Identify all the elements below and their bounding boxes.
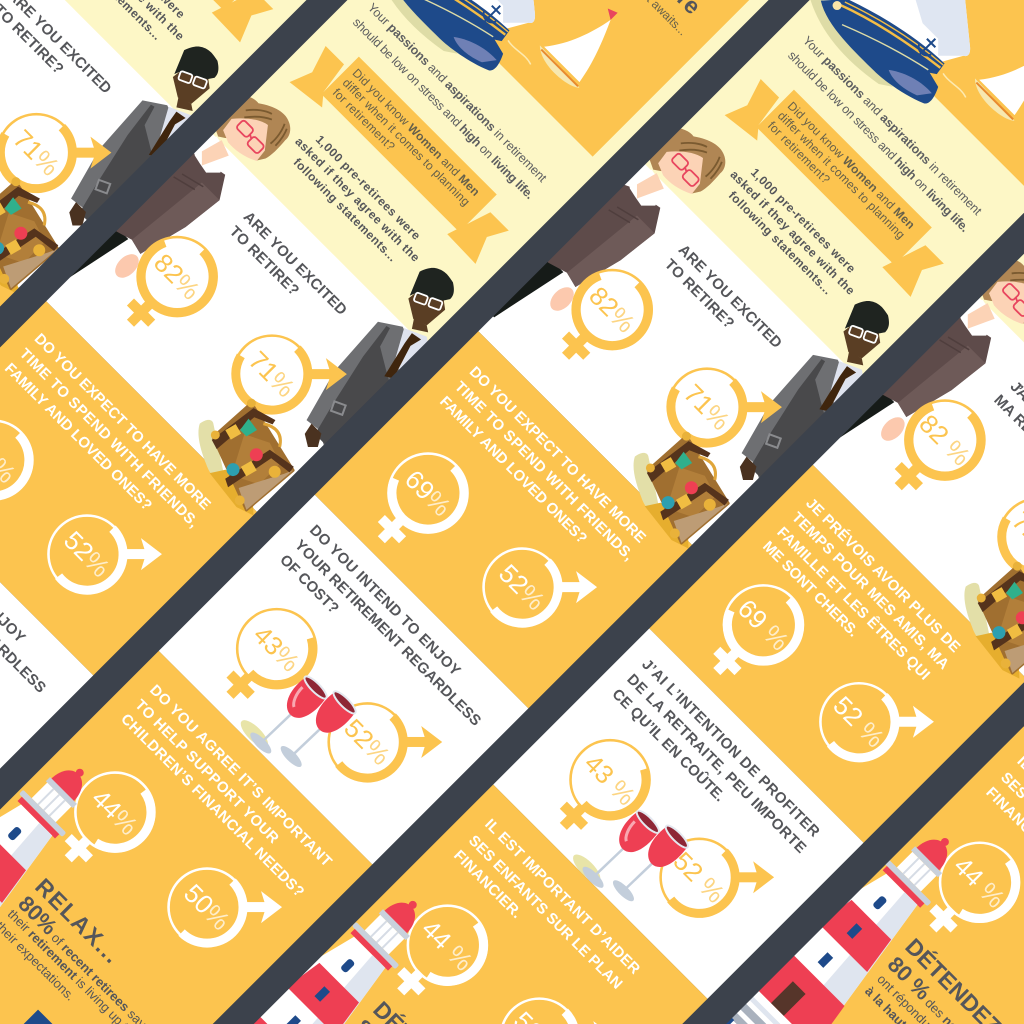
male ring 52%: 52 % bbox=[668, 846, 731, 909]
survey intro text: following statements... bbox=[726, 188, 835, 297]
question heading: TO RETIRE? bbox=[661, 256, 737, 332]
sailboat icon bbox=[507, 0, 636, 100]
man illustration bbox=[41, 38, 252, 249]
male ring 50% bbox=[485, 964, 630, 1024]
ribbon text: for retirement? bbox=[765, 119, 833, 187]
passions text: Your passions and aspirations in retirement bbox=[365, 0, 550, 185]
male ring 71% bbox=[0, 80, 127, 225]
question text: IL EST IMPORTANT D’AIDER bbox=[481, 816, 643, 978]
suitcase icon bbox=[176, 384, 312, 520]
female ring 69% bbox=[353, 437, 484, 568]
female ring 43% bbox=[535, 724, 672, 861]
female ring 44%: 44% bbox=[86, 783, 144, 841]
question heading: ARE YOU EXCITED bbox=[240, 208, 350, 319]
question text: FAMILY AND LOVED ONES? bbox=[1, 360, 155, 514]
lighthouse icon bbox=[681, 788, 992, 1024]
ribbon text: Did you know Women and Men bbox=[350, 66, 483, 199]
navy brochure icon bbox=[10, 1010, 80, 1024]
question text: FAMILY AND LOVED ONES? bbox=[436, 393, 590, 547]
lighthouse icon bbox=[0, 718, 127, 1024]
male ring 52%: 52 % bbox=[827, 690, 890, 753]
female ring 69%: 69 % bbox=[732, 593, 795, 656]
question text bbox=[0, 489, 64, 711]
question text: CHILDREN’S FINANCIAL NEEDS? bbox=[117, 711, 307, 901]
ribbon tail bbox=[54, 0, 285, 44]
passions text: should be low on stress and high on living life. bbox=[350, 15, 537, 202]
suitcase icon bbox=[0, 163, 77, 298]
strip: French panel 4 bbox=[640, 0, 1024, 1024]
female ring 69% bbox=[689, 569, 819, 699]
male ring 52%: 52% bbox=[58, 525, 116, 583]
female ring 44% bbox=[373, 889, 505, 1021]
survey intro text: asked if they agree with the bbox=[292, 134, 423, 265]
ribbon banner bbox=[290, 35, 521, 266]
question text: JE PRÉVOIS AVOIR PLUS DE bbox=[802, 495, 964, 656]
relax text bbox=[0, 873, 173, 1024]
question text: CE QU’IL EN COÛTE. bbox=[609, 685, 729, 805]
female ring 69%: 69% bbox=[399, 464, 457, 522]
question text: FAMILLE ET LES ÊTRES QUI bbox=[773, 523, 934, 684]
question text: ME SONT CHERS. bbox=[759, 538, 862, 640]
captain hat icon bbox=[796, 0, 1014, 121]
man illustration bbox=[276, 259, 487, 470]
female ring 82%: 82% bbox=[583, 281, 641, 339]
question text: DO YOU EXPECT TO HAVE MORE bbox=[466, 363, 649, 546]
question heading bbox=[990, 376, 1024, 503]
female ring 69% bbox=[0, 404, 49, 535]
ribbon banner bbox=[725, 68, 956, 299]
ribbon text: differ when it comes to planning bbox=[775, 109, 908, 242]
male ring 71% bbox=[217, 301, 363, 447]
question text: SES ENFANTS SUR LE PLAN bbox=[465, 832, 626, 993]
woman illustration bbox=[808, 233, 1024, 489]
male ring 52% bbox=[645, 805, 790, 950]
male ring 52% bbox=[468, 514, 613, 660]
male ring 71%: 71% bbox=[7, 124, 65, 182]
question text: DO YOU EXPECT TO HAVE MORE bbox=[31, 330, 214, 513]
female ring 44% bbox=[905, 826, 1024, 958]
question text: TEMPS POUR MES AMIS, MA bbox=[788, 509, 952, 673]
question text: TO HELP SUPPORT YOUR bbox=[131, 696, 282, 847]
captain hat icon bbox=[361, 0, 579, 88]
male ring 71%: 71% bbox=[678, 378, 736, 436]
male ring 52% bbox=[313, 669, 458, 815]
ribbon text: differ when it comes to planning bbox=[340, 76, 473, 209]
passions text: Your passions and aspirations in retirement bbox=[800, 33, 985, 218]
wine glasses icon bbox=[237, 657, 359, 779]
female ring 44%: 44 % bbox=[416, 914, 479, 977]
male ring 52% bbox=[804, 649, 950, 794]
male ring 52%: 52% bbox=[338, 713, 396, 771]
question text bbox=[982, 753, 1024, 946]
relax text: RELAX... bbox=[30, 873, 125, 968]
question text: J’AI L’INTENTION DE PROFITER bbox=[638, 656, 823, 841]
male ring 71% bbox=[653, 334, 798, 480]
female ring 82% bbox=[538, 254, 668, 384]
question text: DO YOU AGREE IT’S IMPORTANT bbox=[146, 682, 335, 870]
female ring 44% bbox=[40, 756, 172, 888]
survey intro text: asked if they agree with the bbox=[727, 167, 858, 298]
female ring 44%: 44 % bbox=[948, 851, 1011, 914]
lighthouse icon bbox=[149, 850, 460, 1024]
question text: DE LA RETRAITE, PEU IMPORTE bbox=[623, 671, 809, 857]
sailboat icon bbox=[942, 5, 1024, 134]
female ring 82%: 82% bbox=[148, 248, 206, 306]
question text: YOUR RETIREMENT REGARDLESS bbox=[291, 537, 484, 730]
female ring 43%: 43% bbox=[248, 620, 306, 678]
ribbon text: for retirement? bbox=[330, 86, 398, 154]
male ring 52%: 52% bbox=[493, 558, 551, 616]
passions text: should be low on stress and high on living life. bbox=[785, 48, 972, 235]
question text: TIME TO SPEND WITH FRIENDS, bbox=[16, 345, 202, 531]
female ring 43% bbox=[202, 593, 339, 730]
question heading: ARE YOU EXCITED bbox=[675, 241, 785, 352]
survey intro text: following statements... bbox=[291, 155, 400, 264]
ribbon text: Did you know Women and Men bbox=[785, 99, 918, 232]
woman illustration bbox=[477, 103, 733, 359]
strip: English panel, far left bbox=[0, 0, 601, 980]
male ring 52% bbox=[33, 481, 178, 627]
question text: OF COST? bbox=[276, 551, 342, 617]
woman illustration bbox=[42, 70, 298, 326]
female ring 82% bbox=[870, 384, 1001, 515]
survey intro text bbox=[46, 0, 199, 55]
survey intro text: 1,000 pre-retirees were bbox=[748, 165, 859, 276]
suitcase icon bbox=[942, 547, 1024, 683]
man illustration bbox=[711, 292, 922, 503]
survey intro text: 1,000 pre-retirees were bbox=[313, 132, 423, 243]
male ring 71% bbox=[983, 464, 1024, 610]
female ring 43%: 43 % bbox=[578, 748, 642, 811]
male ring 50%: 50% bbox=[178, 878, 236, 936]
male ring 71%: 71% bbox=[243, 345, 301, 403]
question heading: TO RETIRE? bbox=[226, 223, 302, 299]
question text: FINANCIER. bbox=[450, 847, 525, 922]
question text bbox=[759, 495, 967, 702]
question text: DO YOU INTEND TO ENJOY bbox=[306, 522, 464, 679]
question text: TIME TO SPEND WITH FRIENDS, bbox=[451, 378, 637, 564]
female ring 82%: 82 % bbox=[913, 408, 976, 472]
wine glasses icon bbox=[569, 791, 691, 914]
suitcase icon bbox=[612, 417, 747, 553]
female ring 82% bbox=[103, 221, 233, 351]
male ring 50% bbox=[153, 834, 298, 980]
